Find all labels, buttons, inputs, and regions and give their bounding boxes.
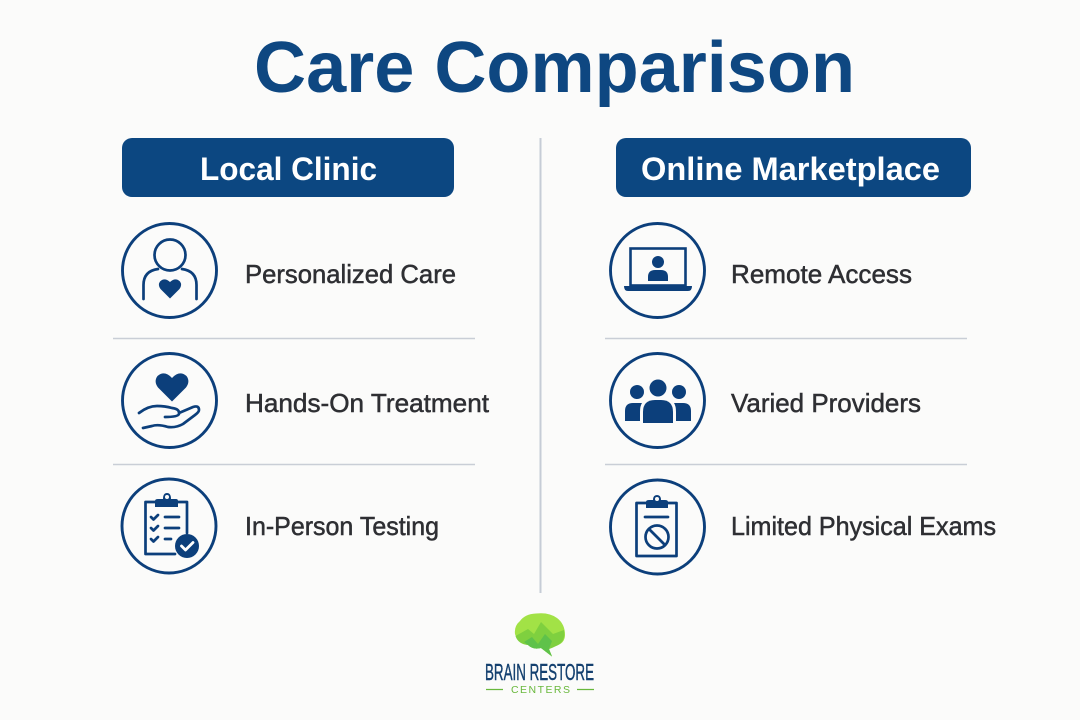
heading: local clinic: Local Clinic (200, 151, 377, 187)
text: personalized care: Personalized Care (245, 259, 456, 289)
text: in-person testing: In-Person Testing (245, 511, 439, 541)
row: remote access (610, 224, 912, 318)
row: in-person testing (122, 479, 439, 573)
text: limited physical exams: Limited Physical Exams (731, 511, 996, 541)
heading: local clinic (122, 138, 454, 197)
logo: brain restore centers (485, 613, 594, 696)
text: centers: CENTERS (511, 684, 570, 696)
icon: clipboard with check (122, 479, 216, 573)
icon: group of people (610, 354, 704, 448)
text: hands-on treatment: Hands-On Treatment (245, 388, 490, 418)
icon: laptop with person (610, 224, 704, 318)
row: personalized care (122, 224, 456, 318)
icon: person with heart (122, 224, 216, 318)
text: brain restore: BRAIN RESTORE (485, 659, 594, 685)
text: varied providers: Varied Providers (731, 388, 921, 418)
panel: local clinic (122, 138, 490, 573)
row: varied providers (610, 354, 921, 448)
heading: online marketplace (616, 138, 971, 197)
icon: hand holding heart (122, 354, 216, 448)
heading: online marketplace: Online Marketplace (641, 151, 940, 187)
title: Care Comparison (254, 28, 855, 108)
icon: clipboard with prohibition sign (610, 480, 704, 574)
row: hands-on treatment (122, 354, 490, 448)
text: remote access: Remote Access (731, 259, 912, 289)
panel: online marketplace (610, 138, 996, 574)
row: limited physical exams (610, 480, 996, 574)
icon: green brain (515, 613, 565, 656)
